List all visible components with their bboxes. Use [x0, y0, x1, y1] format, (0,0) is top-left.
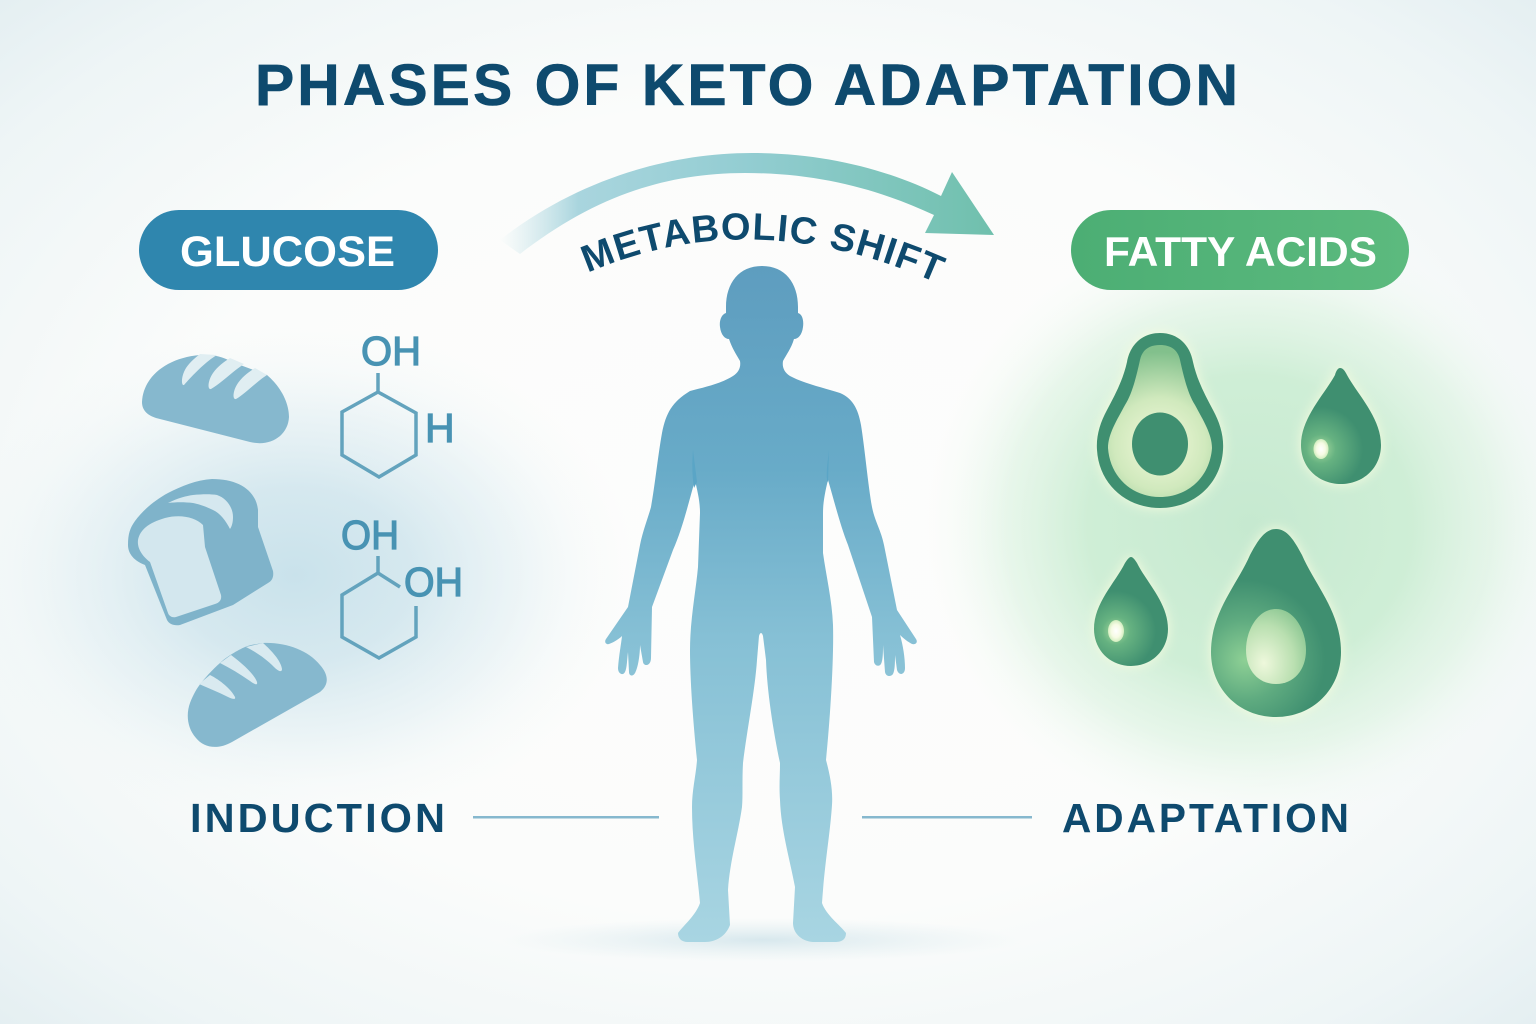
icon: molecule top [342, 328, 455, 477]
curved label: metabolic shift: METABOLIC SHIFT [580, 213, 947, 280]
icon: molecule bottom: OH [341, 512, 399, 558]
arrow: metabolic shift [500, 153, 994, 254]
icon: molecule top: H [425, 405, 455, 451]
pill: glucose: GLUCOSE [180, 228, 395, 276]
label: induction: INDUCTION [190, 795, 448, 841]
icon: molecule bottom [341, 512, 463, 658]
pill: fatty acids: FATTY ACIDS [1104, 228, 1377, 275]
icon: bread loaf top [142, 354, 289, 443]
icon: bread slice [128, 479, 273, 625]
icon: large avocado droplet [1211, 529, 1341, 717]
label: adaptation: ADAPTATION [1062, 795, 1352, 841]
icon: avocado [1097, 333, 1223, 508]
icon: fat droplet bottom left [1094, 557, 1168, 666]
human silhouette [605, 266, 917, 942]
icon: bread loaf bottom [188, 643, 327, 747]
icon: fat droplet top right [1301, 368, 1381, 484]
pill: glucose [139, 210, 438, 290]
icon: molecule top: OH [361, 328, 421, 374]
pill: fatty acids [1071, 210, 1409, 290]
icon: molecule bottom: OH [404, 559, 463, 605]
connector: adaptation [862, 816, 1032, 818]
connector: induction [473, 816, 659, 818]
title: PHASES OF KETO ADAPTATION [255, 53, 1241, 118]
